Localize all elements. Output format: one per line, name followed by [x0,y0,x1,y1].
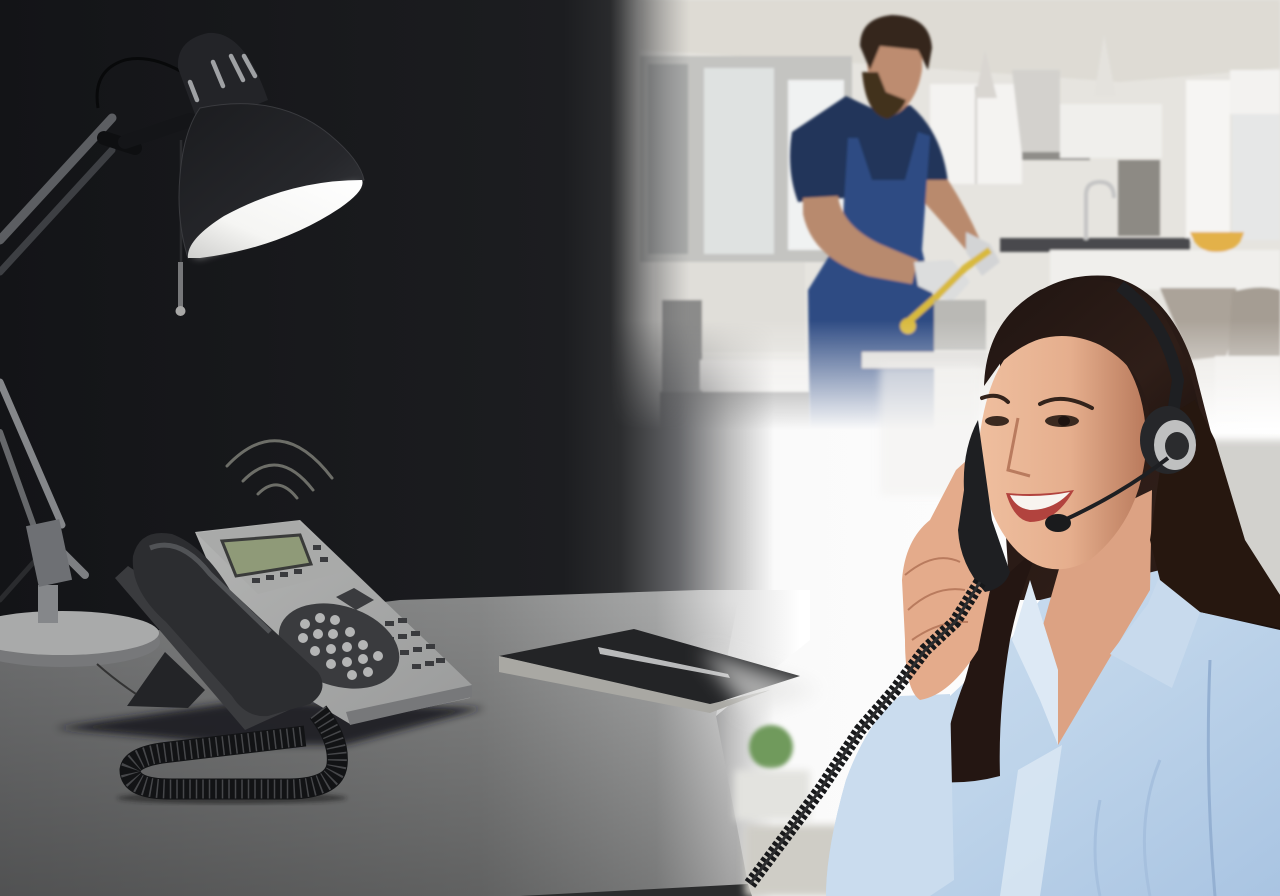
lamp [0,33,364,667]
right hair strand [1145,400,1280,628]
kitchen background with plumber [590,0,1280,450]
living area [655,262,805,352]
keypad [268,589,410,703]
phone curly cord [750,582,980,884]
lamp light opening [188,180,363,258]
plumber [790,15,1000,440]
notebook [499,629,820,715]
hair front [984,280,1208,470]
signal waves [227,441,332,498]
shirt [788,94,950,204]
face [978,334,1146,569]
back hair [1000,275,1280,640]
pendant lights [976,72,997,98]
side buttons [252,545,445,669]
pull chain [180,140,182,270]
headset [1045,286,1196,532]
left arm sleeve [826,694,954,896]
right arm [922,180,980,250]
sofa [1160,288,1237,360]
overalls [808,132,934,440]
screen [222,535,311,576]
hand and handset [902,450,992,700]
collar [1012,580,1058,745]
phone base [195,520,472,724]
window [640,56,852,262]
lamp shade [178,33,268,128]
wall cabinets [930,70,1280,240]
handset [115,566,310,730]
desk surface [0,590,810,896]
neck and chest [1036,490,1152,745]
gloves and tool [914,260,970,302]
lower right of desk: plant and floor [735,725,840,896]
ceiling [640,0,1280,82]
kitchen counter [1000,238,1190,252]
lamp base [0,585,160,667]
woman with headset [750,275,1280,896]
screen panel [196,521,350,594]
shirt [826,570,1280,896]
lamp cord [97,58,182,108]
brows and eyes [982,396,1092,408]
nose [1008,418,1030,476]
head [866,38,922,118]
left arm [803,196,918,284]
smile [1006,490,1074,522]
lamp light glow [192,182,360,258]
desk phone [115,520,472,730]
lower right background [1190,440,1280,610]
counter under the plumber [880,366,980,496]
left hair strand [940,545,1040,782]
lamp arms [0,118,190,600]
desk shadow of phone [55,700,485,745]
coiled cord on desk [117,712,347,804]
